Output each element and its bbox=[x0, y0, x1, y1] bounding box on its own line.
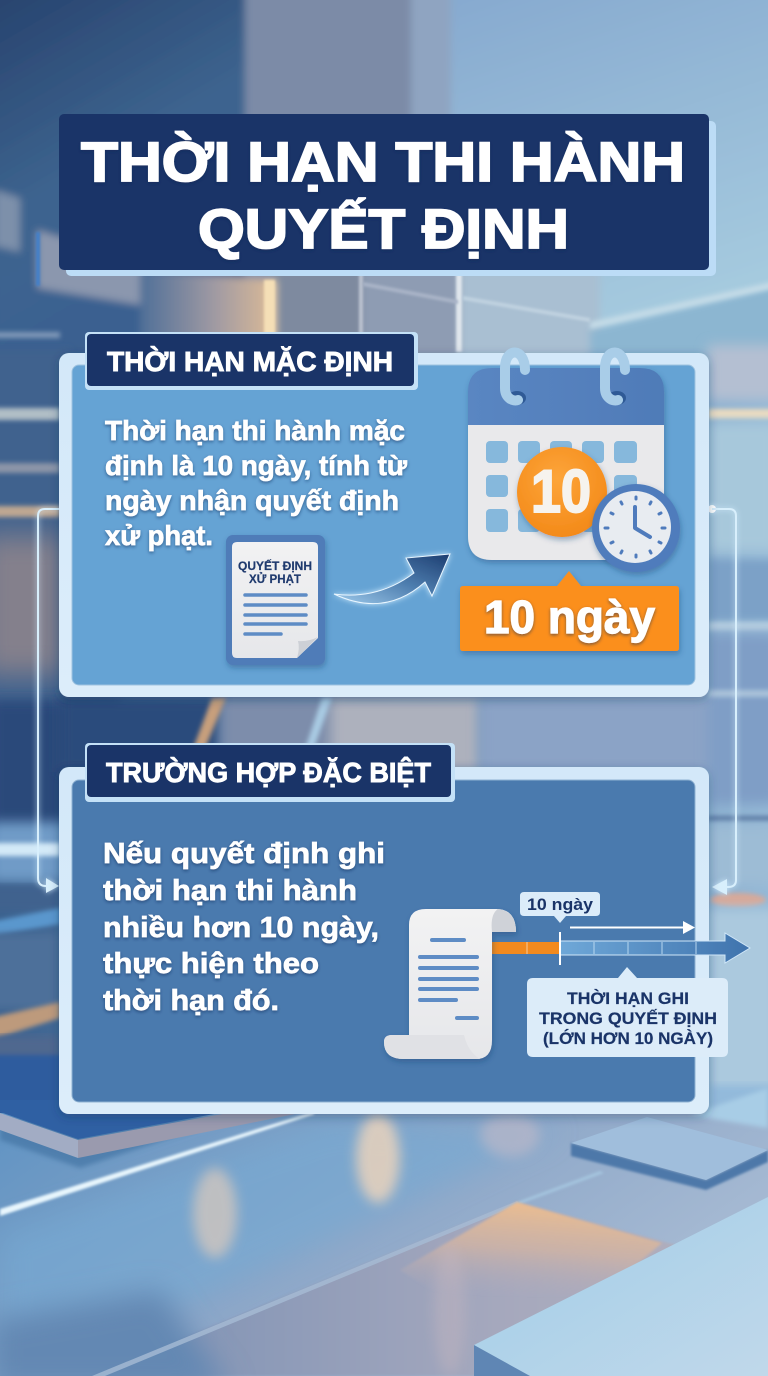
body text: special case: Nếu quyết định ghi bbox=[103, 838, 385, 870]
panel: special case bbox=[59, 743, 750, 1114]
connector arrow: left bbox=[38, 509, 60, 893]
title text: THỜI HẠN THI HÀNH bbox=[81, 130, 685, 193]
panel: default deadline bbox=[59, 332, 709, 697]
body text: default deadline: xử phạt. bbox=[105, 520, 213, 551]
body text: special case: thời hạn đó. bbox=[103, 985, 279, 1017]
timeline bar bbox=[492, 921, 750, 965]
badge: 10 days: 10 ngày bbox=[484, 591, 655, 643]
body text: default deadline bbox=[105, 415, 407, 551]
icon: calendar with clock bbox=[468, 352, 680, 572]
label: 10 days: 10 ngày bbox=[527, 895, 594, 914]
label: 10 days bbox=[520, 892, 600, 923]
section tab: default deadline: THỜI HẠN MẶC ĐỊNH bbox=[107, 346, 393, 377]
body text: special case: thời hạn thi hành bbox=[103, 875, 357, 907]
section tab: default deadline bbox=[85, 332, 418, 390]
icon: calendar with clock: 10 bbox=[531, 458, 591, 525]
body text: special case: nhiều hơn 10 ngày, bbox=[103, 912, 379, 944]
connector arrow: right bbox=[708, 505, 736, 895]
callout: deadline stated in decision bbox=[527, 967, 728, 1057]
icon: scroll document bbox=[384, 909, 516, 1059]
title text bbox=[81, 130, 685, 260]
callout: deadline stated in decision: TRONG QUYẾT ĐỊNH bbox=[539, 1009, 717, 1028]
icon: decision document bbox=[226, 535, 325, 665]
callout: deadline stated in decision: THỜI HẠN GHI bbox=[567, 989, 689, 1008]
body text: default deadline: định là 10 ngày, tính từ bbox=[105, 450, 407, 481]
floor bbox=[0, 1110, 768, 1376]
arrow: document to calendar bbox=[334, 554, 450, 604]
callout: deadline stated in decision: (LỚN HƠN 10 NGÀY) bbox=[543, 1029, 713, 1048]
body text: special case bbox=[103, 838, 385, 1017]
icon: decision document: XỬ PHẠT bbox=[249, 573, 301, 586]
badge: 10 days bbox=[460, 571, 679, 651]
title text: QUYẾT ĐỊNH bbox=[198, 197, 569, 260]
body text: default deadline: ngày nhận quyết định bbox=[105, 485, 399, 516]
section tab: special case bbox=[85, 743, 455, 802]
title banner bbox=[59, 114, 716, 276]
body text: special case: thực hiện theo bbox=[103, 948, 319, 980]
body text: default deadline: Thời hạn thi hành mặc bbox=[105, 415, 405, 446]
icon: decision document: QUYẾT ĐỊNH bbox=[238, 560, 312, 573]
section tab: special case: TRƯỜNG HỢP ĐẶC BIỆT bbox=[106, 757, 431, 788]
